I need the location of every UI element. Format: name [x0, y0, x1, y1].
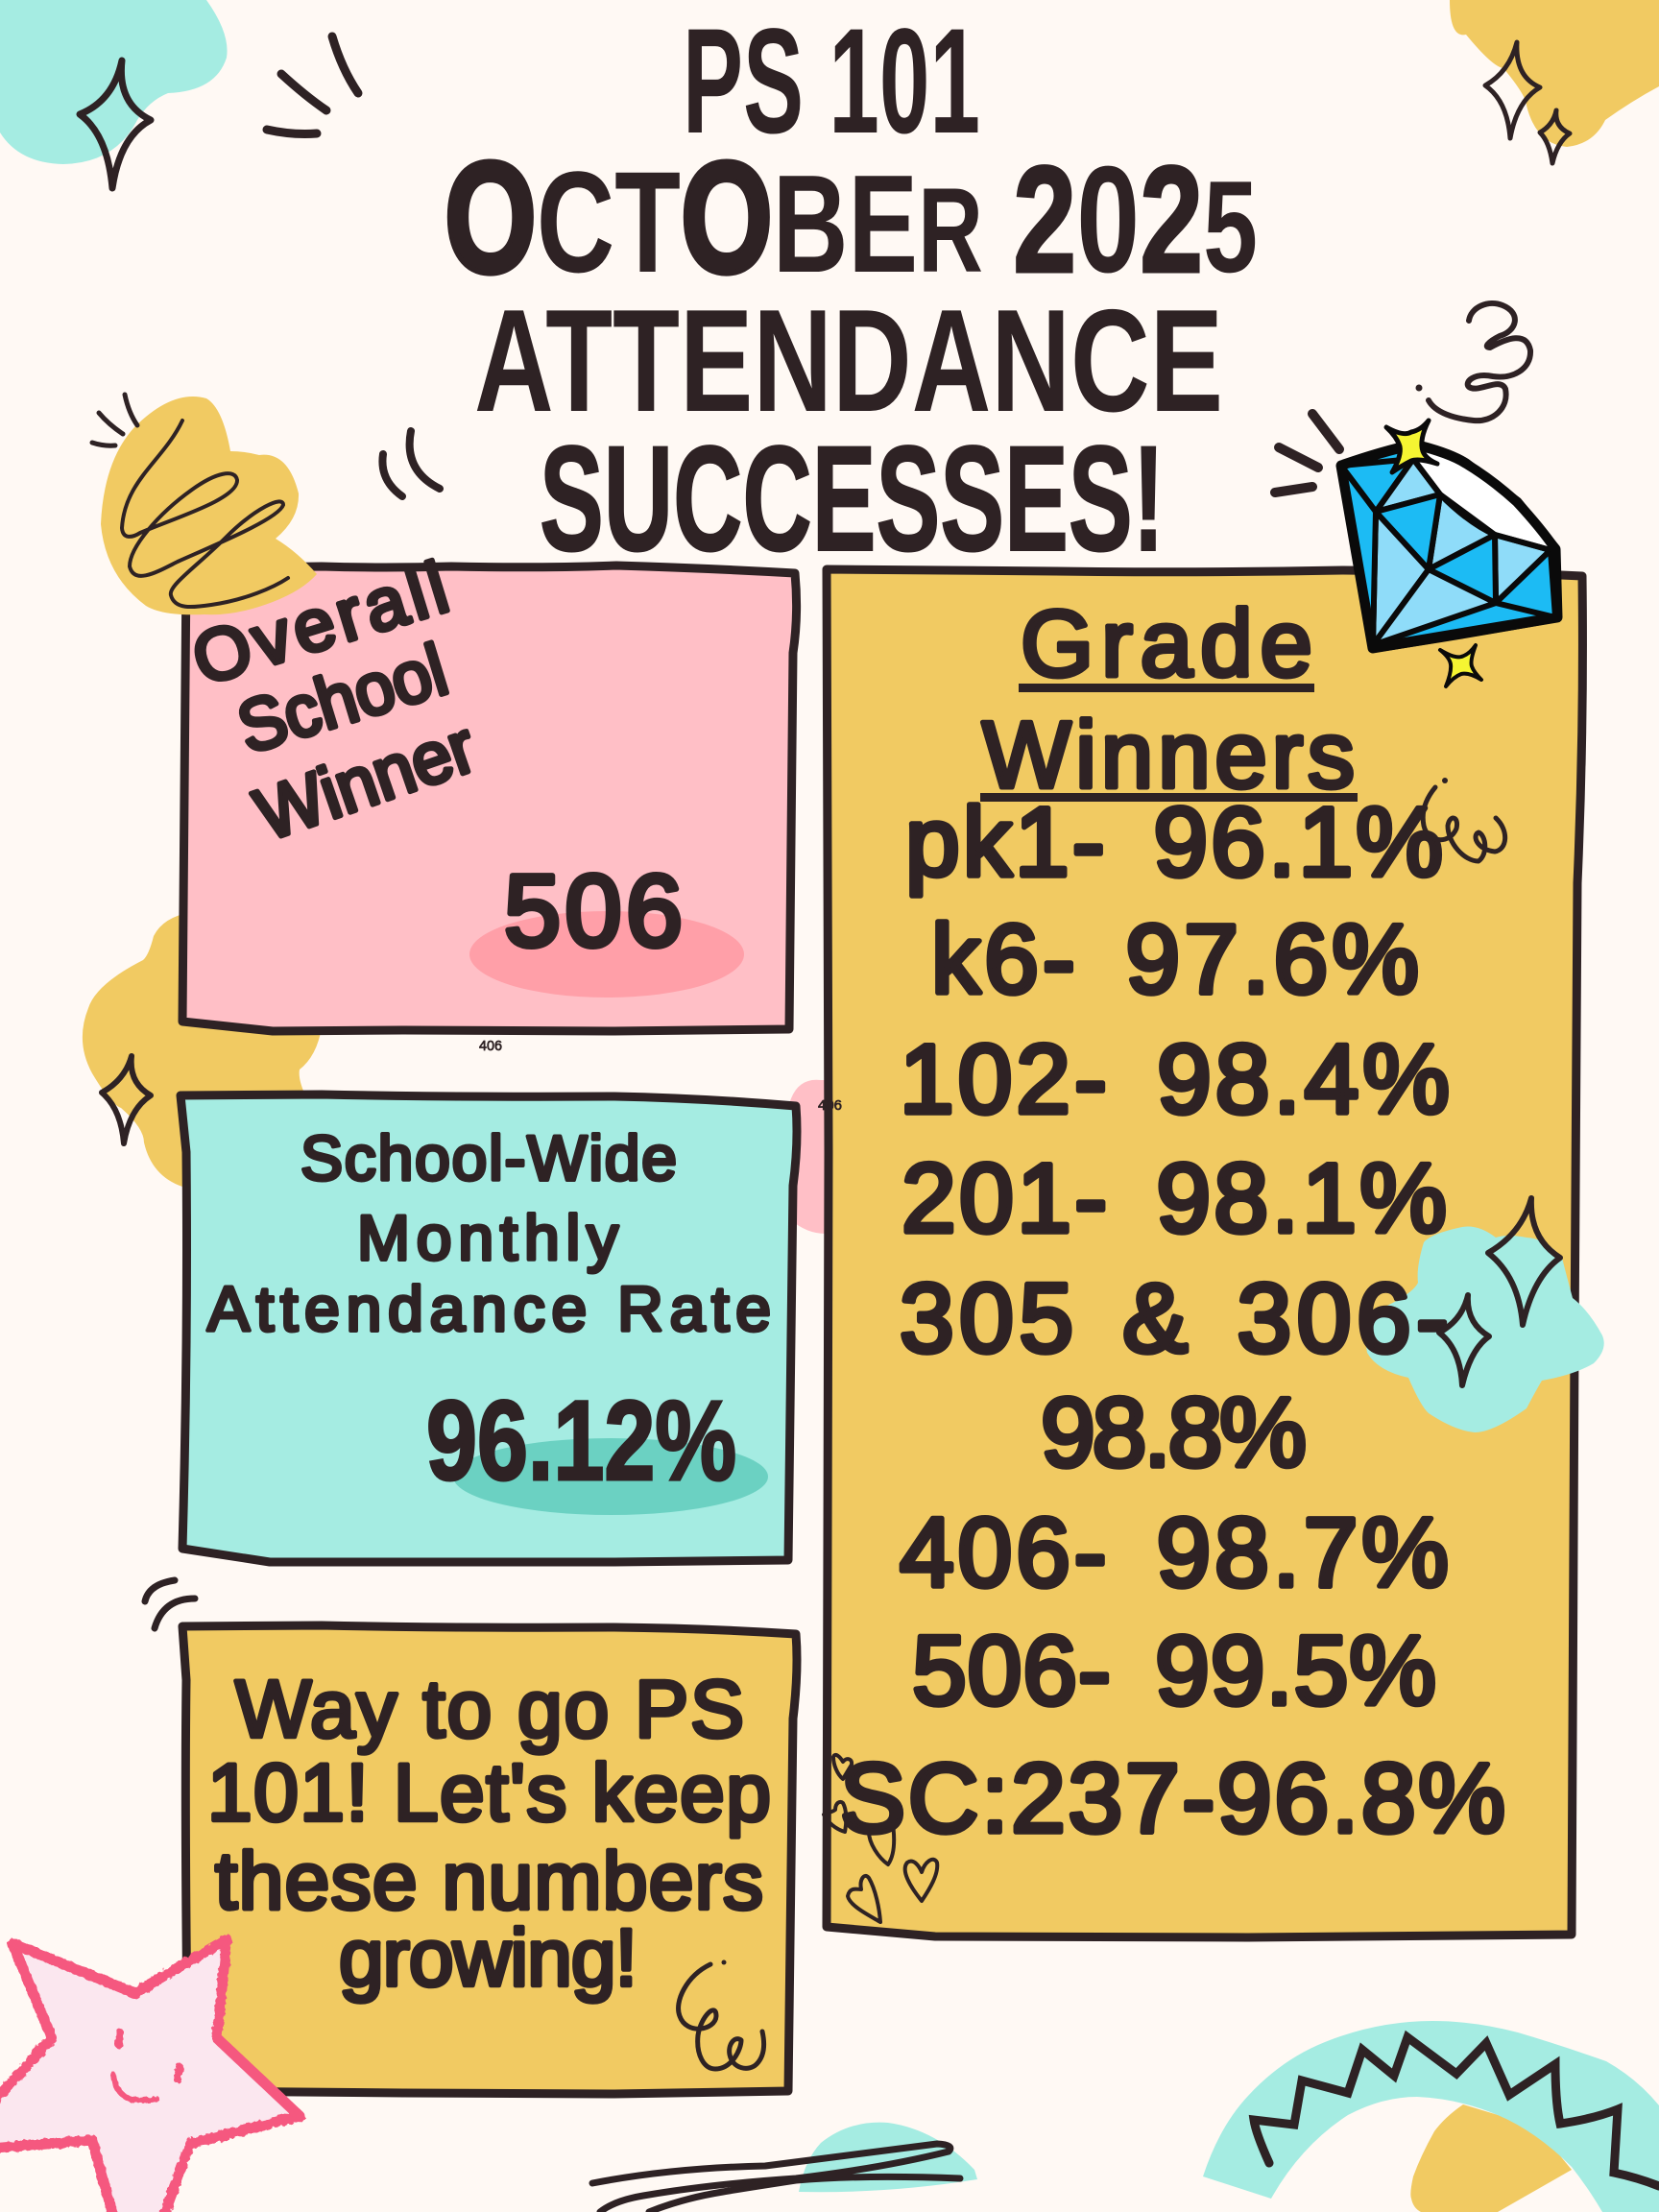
heading: school-wide monthly attendance rate: Monthly — [357, 1202, 618, 1273]
decoration: bottom-right gold shape — [1410, 2104, 1572, 2212]
heading: grade winners: Grade — [1021, 590, 1312, 696]
diamond white facet edge — [1413, 459, 1551, 550]
blob: bottom teal — [799, 2123, 977, 2192]
panel background — [182, 565, 797, 1031]
diamond outline — [1341, 445, 1557, 648]
heading: overall school winner: School — [228, 629, 456, 769]
diamond light facets — [1373, 459, 1551, 645]
icon: swirl tick marks near title — [382, 431, 440, 496]
list: grade attendance rates: 305 & 306- — [900, 1263, 1449, 1373]
panel: school-wide attendance — [180, 1094, 797, 1562]
star body — [0, 1939, 300, 2212]
list: grade attendance rates: 98.8% — [1041, 1378, 1307, 1487]
icon: mid-left sparkle — [102, 1056, 151, 1143]
icon: bottom scribble lines — [592, 2144, 960, 2212]
icon: spiral by first row — [1423, 778, 1505, 861]
icon: yellow star on diamond — [1386, 421, 1437, 472]
title line: October 2025: OCTOBER 2025 — [445, 130, 1258, 305]
icon: diamond tick marks — [1275, 414, 1339, 493]
list: grade attendance rates: 102- 98.4% — [900, 1024, 1450, 1134]
panel: congratulation message — [182, 1625, 797, 2094]
blob: pink behind panels — [789, 1080, 845, 1234]
blob: teal on grade panel — [1366, 1226, 1604, 1432]
icon: diamond — [1341, 445, 1557, 648]
title line: Attendance: ATTENDANCE — [474, 279, 1223, 443]
diamond white top facet — [1413, 445, 1555, 549]
diamond dark facets — [1341, 459, 1555, 645]
icon: spiral — [679, 1960, 764, 2069]
title — [445, 0, 1258, 583]
panel background — [182, 1625, 797, 2094]
title line: Successes: SUCCESSES! — [540, 416, 1165, 583]
icon: sparkles on teal blob — [1439, 1198, 1560, 1385]
list: grade attendance rates: pk1- 96.1% — [905, 787, 1443, 897]
title line: PS 101: PS 101 — [683, 0, 980, 165]
message text: Way to go PS — [235, 1664, 744, 1754]
list: grade attendance rates: SC:237-96.8% — [840, 1743, 1505, 1853]
blob: top-left teal — [0, 0, 228, 164]
heading: school-wide monthly attendance rate — [207, 1122, 771, 1344]
list: grade attendance rates: 506- 99.5% — [912, 1616, 1436, 1725]
icon: tick swirl above message panel — [145, 1580, 195, 1628]
heading: school-wide monthly attendance rate: Attendance Rate — [207, 1273, 771, 1344]
icon: top-left tick marks — [267, 36, 358, 134]
list: grade attendance rates — [840, 787, 1505, 1853]
highlight ellipse — [453, 1438, 768, 1515]
blob: top-right gold — [1450, 0, 1659, 147]
blob: mid-left gold — [83, 912, 322, 1187]
icon: overall winner scribble — [122, 421, 288, 607]
icon: spiral top-right — [1415, 303, 1530, 421]
message text — [207, 1664, 771, 2003]
blob: gold scribble corner — [101, 397, 317, 614]
panel: overall school winner — [182, 565, 797, 1031]
heading: overall school winner: Overall — [183, 546, 457, 701]
value: 96.12%: 96.12% — [426, 1378, 736, 1504]
heading: overall school winner: Winner — [246, 706, 486, 856]
icon: top-left sparkle — [80, 60, 151, 188]
icon: hearts — [824, 1755, 937, 1922]
message text: 101! Let's keep — [207, 1747, 771, 1838]
small label: 406: 406 — [479, 1038, 502, 1054]
decoration: bottom-right teal arc — [1203, 2021, 1659, 2212]
icon: overall winner tick marks — [92, 395, 137, 445]
list: grade attendance rates: k6- 97.6% — [931, 904, 1419, 1014]
small label: 406 overlapping panel edge: 406 — [818, 1097, 842, 1114]
icon: yellow star below diamond — [1440, 645, 1481, 686]
panel background — [180, 1094, 797, 1562]
heading: grade winners — [980, 590, 1358, 807]
value: 506: 506 — [504, 854, 683, 968]
panel: grade winners — [818, 569, 1604, 1937]
heading: overall school winner — [183, 546, 486, 856]
diamond outer body — [1341, 445, 1557, 648]
message text: growing! — [339, 1912, 637, 2003]
highlight ellipse — [469, 911, 744, 998]
icon: top-right sparkles — [1485, 42, 1570, 163]
panel background — [827, 569, 1582, 1937]
heading: grade winners: Winners — [982, 702, 1355, 807]
list: grade attendance rates: 201- 98.1% — [902, 1143, 1447, 1253]
heading: school-wide monthly attendance rate: School-Wide — [301, 1122, 677, 1193]
star face — [113, 2032, 180, 2101]
icon: zigzag line on arc — [1254, 2037, 1659, 2186]
list: grade attendance rates: 406- 98.7% — [900, 1498, 1449, 1607]
icon: smiling star — [0, 1939, 300, 2212]
message text: these numbers — [215, 1836, 763, 1926]
